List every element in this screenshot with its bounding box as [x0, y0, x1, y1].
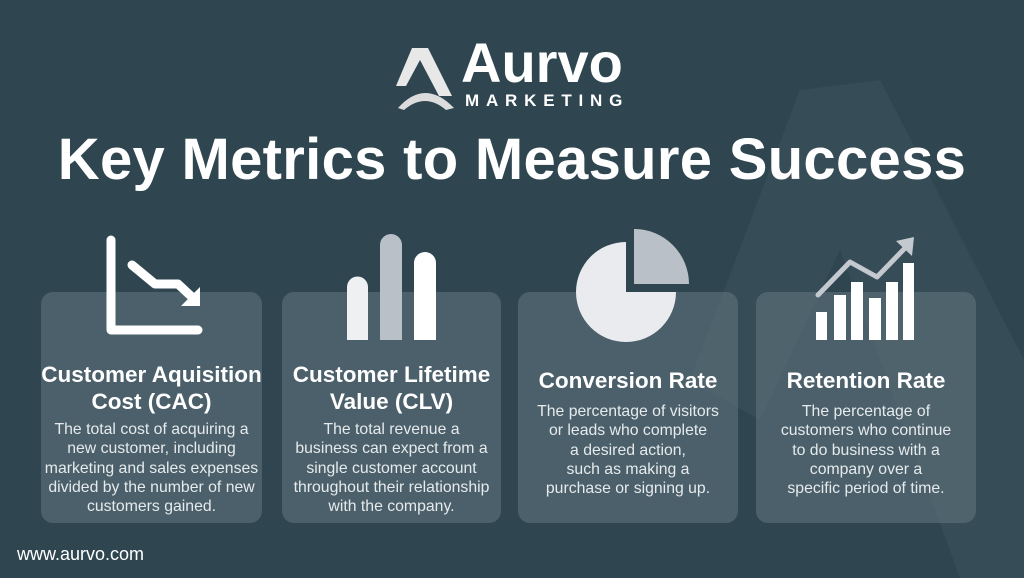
panel: CLV: single customer account	[306, 460, 477, 477]
panel: conversion: a desired action,	[570, 442, 686, 459]
icon: declining chart	[111, 240, 200, 330]
panel: CLV	[282, 292, 501, 523]
logo text: Aurvo	[461, 31, 623, 94]
panel: retention	[756, 292, 976, 523]
panel: CAC: new customer, including	[67, 440, 236, 457]
panel: CAC: Cost (CAC)	[92, 389, 211, 414]
panel: CAC	[41, 292, 262, 523]
panel: retention: company over a	[810, 461, 922, 478]
panel: CLV: throughout their relationship	[294, 479, 489, 496]
panel: CLV: business can expect from a	[295, 440, 488, 457]
panel: retention: customers who continue	[781, 422, 951, 439]
logo: MARKETING	[465, 91, 629, 110]
panel: conversion: purchase or signing up.	[546, 480, 710, 497]
panel: retention: specific period of time.	[787, 480, 945, 497]
panel: CAC: The total cost of acquiring a	[54, 421, 249, 438]
icon: pie chart	[576, 229, 689, 342]
panel: retention: Retention Rate	[787, 368, 945, 393]
panel: CAC: customers gained.	[87, 498, 216, 515]
logo	[396, 31, 629, 110]
panel: conversion: The percentage of visitors	[537, 403, 719, 420]
panel: CLV: Value (CLV)	[330, 389, 453, 414]
panel: conversion: Conversion Rate	[539, 368, 717, 393]
panel: CLV: The total revenue a	[323, 421, 460, 438]
panel: CAC: marketing and sales expenses	[45, 460, 258, 477]
panel: CAC: divided by the number of new	[48, 479, 255, 496]
panel: retention: The percentage of	[802, 403, 930, 420]
panel: CLV: Customer Lifetime	[293, 362, 490, 387]
panel: CLV: with the company.	[328, 498, 455, 515]
panel: CAC: Customer Aquisition	[41, 362, 262, 387]
panel: conversion	[518, 292, 738, 523]
panel: conversion: such as making a	[567, 461, 689, 478]
title: Key Metrics to Measure Success	[58, 127, 966, 192]
icon: bar chart	[347, 234, 436, 340]
panel: conversion: or leads who complete	[549, 422, 707, 439]
footer url: www.aurvo.com	[17, 544, 144, 564]
panel: retention: to do business with a	[792, 442, 940, 459]
icon: logo mark	[396, 48, 454, 110]
icon: growth chart	[816, 237, 914, 340]
